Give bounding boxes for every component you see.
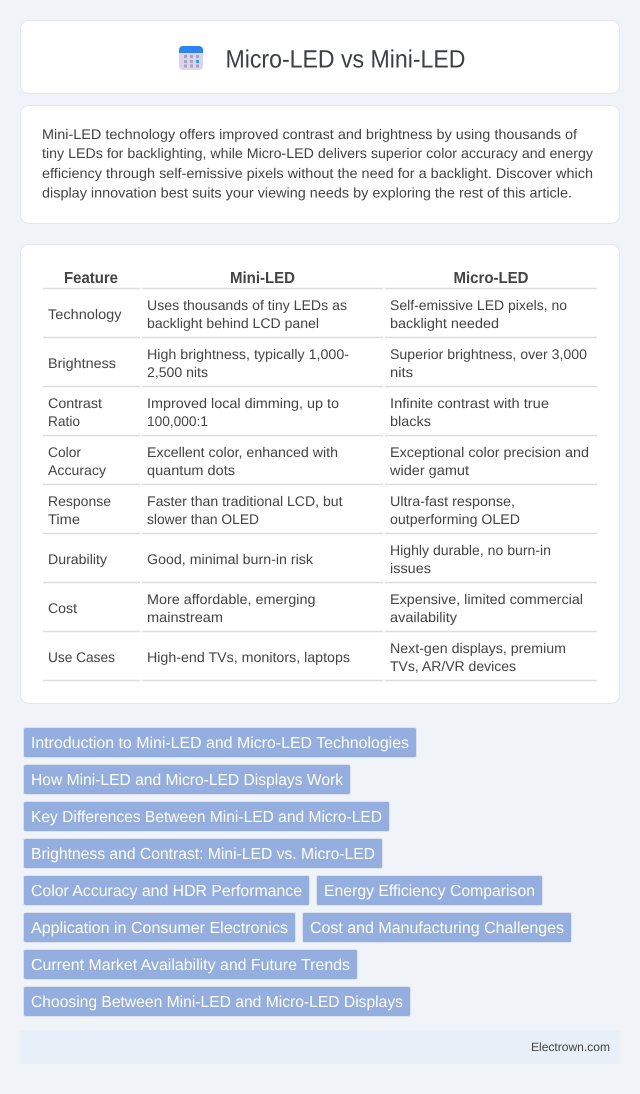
intro text: display innovation best suits your viewing needs by exploring the rest of this article.: [42, 184, 572, 200]
topic: introduction: [24, 728, 416, 758]
topic: energy efficiency: [316, 876, 542, 906]
topic: choosing: [24, 986, 410, 1016]
panel: introduction: [20, 106, 620, 224]
row: color accuracy: Color: [48, 444, 81, 460]
row: use cases: [48, 640, 566, 674]
footer: [20, 1030, 620, 1064]
intro text: Mini-LED technology offers improved contrast and brightness by using thousands of: [42, 126, 577, 142]
topic: color accuracy and HDR: [24, 876, 310, 906]
row: use cases: Next-gen displays, premium: [390, 640, 566, 656]
topic: market availability: [24, 950, 358, 980]
intro text: [42, 126, 593, 200]
row: technology: [48, 297, 567, 331]
row: contrast ratio: Improved local dimming, up to: [147, 395, 339, 411]
row: response time: Ultra-fast response,: [390, 493, 515, 509]
topic links: [24, 728, 572, 1016]
topic: energy efficiency: Energy Efficiency Comparison: [324, 883, 535, 900]
row: cost: Cost: [48, 600, 77, 616]
topic: consumer electronics: [24, 912, 296, 942]
title: Micro-LED vs Mini-LED: [226, 46, 466, 74]
table header: Feature: [64, 270, 118, 287]
topic: introduction: Introduction to Mini-LED and Micro-LED Technologies: [31, 735, 409, 752]
row: response time: outperforming OLED: [390, 511, 520, 527]
intro text: efficiency through self-emissive pixels without the need for a backlight. Discover which: [42, 165, 593, 181]
row: use cases: High-end TVs, monitors, laptops: [147, 649, 350, 665]
topic: cost and manufacturing: [302, 912, 572, 942]
row: durability: issues: [390, 560, 431, 576]
topic: consumer electronics: Application in Consumer Electronics: [31, 920, 288, 937]
topic: market availability: Current Market Availability and Future Trends: [31, 957, 350, 974]
row: brightness: 2,500 nits: [147, 364, 208, 380]
row: color accuracy: wider gamut: [389, 462, 469, 478]
row: brightness: [48, 346, 587, 380]
intro text: tiny LEDs for backlighting, while Micro-LED delivers superior color accuracy and energy: [42, 145, 593, 161]
row: color accuracy: [48, 444, 589, 478]
row: contrast ratio: [48, 395, 549, 429]
row: color accuracy: quantum dots: [147, 462, 235, 478]
topic: key differences: Key Differences Between Mini-LED and Micro-LED: [31, 809, 382, 826]
topic: how displays work: [24, 764, 350, 794]
row: contrast ratio: blacks: [390, 413, 431, 429]
topic: brightness and contrast: Brightness and Contrast: Mini-LED vs. Micro-LED: [31, 846, 375, 863]
row: brightness: Brightness: [48, 355, 116, 371]
panel: comparison table: [20, 244, 620, 704]
row: brightness: Superior brightness, over 3,000: [390, 346, 587, 362]
row: response time: Faster than traditional LCD, but: [147, 493, 343, 509]
row: technology: backlight needed: [390, 315, 499, 331]
topic: cost and manufacturing: Cost and Manufacturing Challenges: [310, 920, 564, 937]
row: durability: Durability: [48, 551, 107, 567]
topic: brightness and contrast: [24, 838, 382, 868]
row: technology: backlight behind LCD panel: [147, 315, 319, 331]
topic: key differences: [24, 802, 390, 832]
row: response time: [48, 493, 520, 527]
row: brightness: nits: [390, 364, 413, 380]
row: brightness: High brightness, typically 1,000-: [147, 346, 349, 362]
row: use cases: Use Cases: [48, 649, 115, 665]
row: response time: Response: [48, 493, 111, 509]
row: cost: availability: [390, 609, 457, 625]
table header: Mini-LED: [230, 270, 295, 287]
table header: [64, 270, 528, 287]
row: durability: Good, minimal burn-in risk: [147, 551, 314, 567]
row: technology: Technology: [48, 306, 121, 322]
row: durability: [48, 542, 551, 576]
row: color accuracy: Excellent color, enhanced with: [147, 444, 338, 460]
row: durability: Highly durable, no burn-in: [390, 542, 551, 558]
row: use cases: TVs, AR/VR devices: [390, 658, 516, 674]
topic: color accuracy and HDR: Color Accuracy and HDR Performance: [31, 883, 302, 900]
row: technology: Uses thousands of tiny LEDs as: [147, 297, 347, 313]
footer: Electrown.com: [531, 1040, 610, 1054]
row: color accuracy: Accuracy: [48, 462, 106, 478]
row: cost: [48, 591, 583, 625]
topic: how displays work: How Mini-LED and Micro-LED Displays Work: [31, 772, 344, 789]
row: cost: mainstream: [147, 609, 223, 625]
row: cost: More affordable, emerging: [147, 591, 316, 607]
row: cost: Expensive, limited commercial: [390, 591, 583, 607]
row: contrast ratio: Contrast: [48, 395, 102, 411]
row: response time: slower than OLED: [147, 511, 259, 527]
topic: choosing: Choosing Between Mini-LED and Micro-LED Displays: [31, 994, 403, 1011]
row: contrast ratio: Infinite contrast with true: [390, 395, 549, 411]
icon: LED grid calendar: [179, 46, 203, 70]
title panel: [20, 20, 620, 94]
row: contrast ratio: 100,000:1: [147, 413, 208, 429]
row: response time: Time: [48, 511, 80, 527]
table header: Micro-LED: [454, 270, 528, 287]
row: technology: Self-emissive LED pixels, no: [390, 297, 567, 313]
row: contrast ratio: Ratio: [48, 413, 80, 429]
row: color accuracy: Exceptional color precision and: [390, 444, 589, 460]
